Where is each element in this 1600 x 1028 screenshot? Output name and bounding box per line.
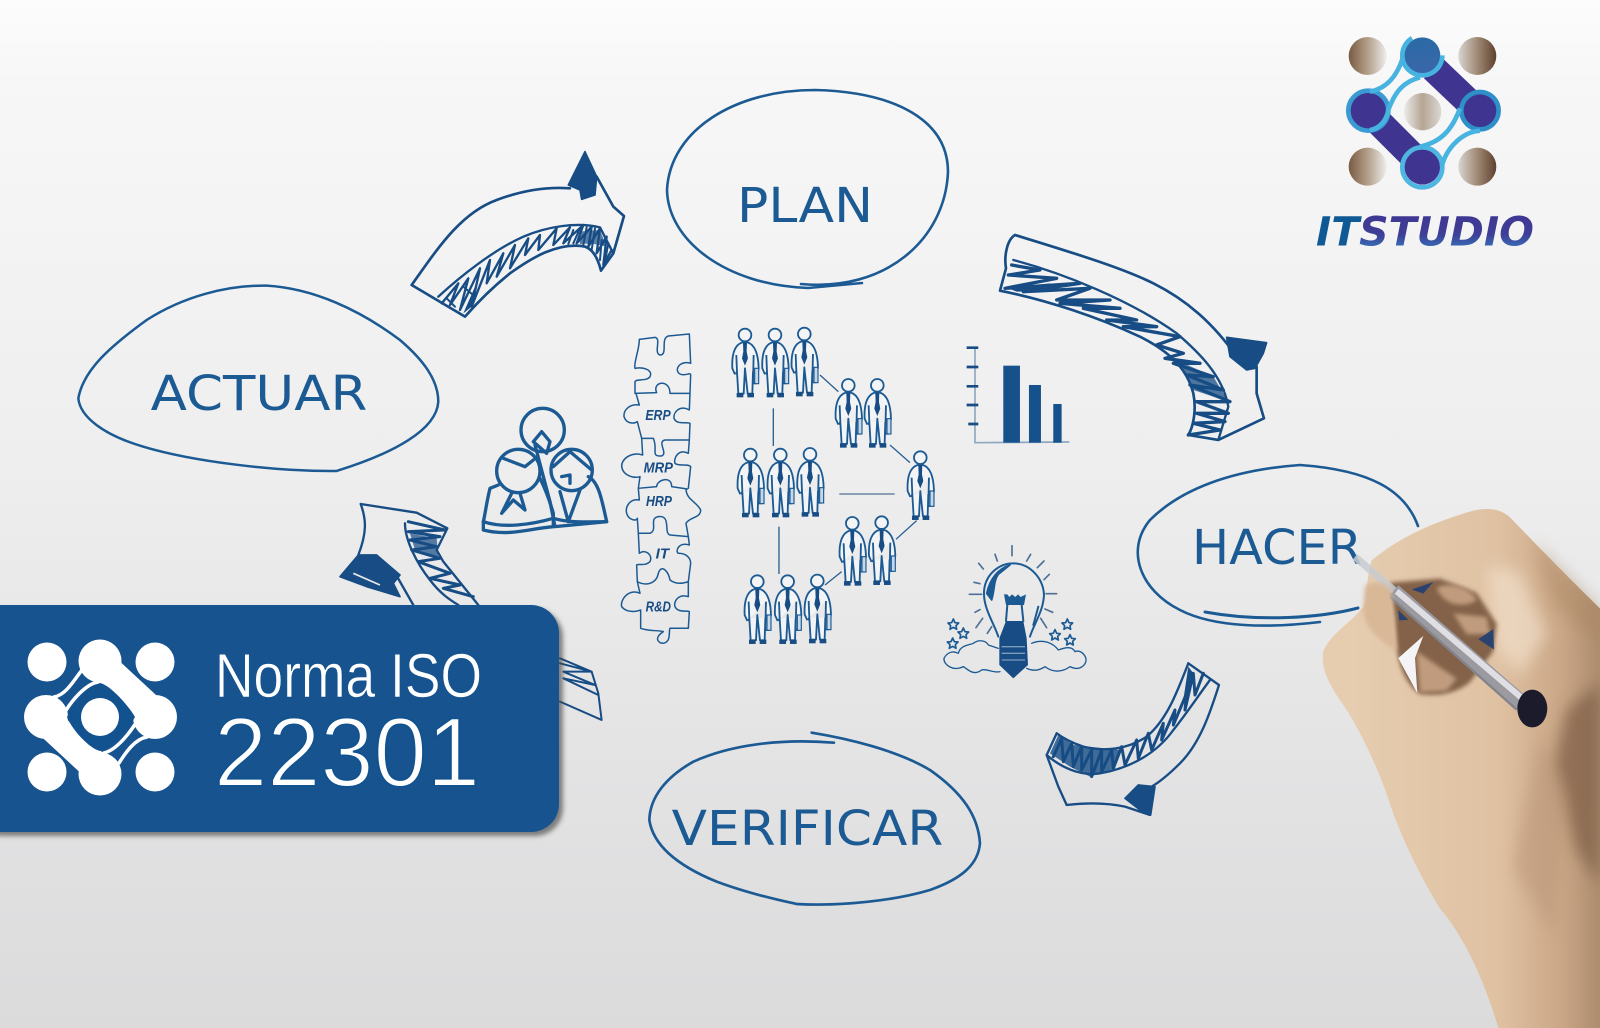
hand holding pen xyxy=(1323,509,1600,1028)
puzzle column xyxy=(621,334,701,643)
pen xyxy=(1355,557,1547,727)
org chart of people xyxy=(732,328,934,644)
bubble: VERIFICAR xyxy=(649,733,980,905)
arrow: actuar to plan xyxy=(412,152,624,317)
bubble: PLAN: PLAN xyxy=(737,178,873,234)
badge: Norma ISO 22301 xyxy=(0,605,559,832)
arrow: verificar to actuar xyxy=(340,504,602,720)
icon: team heads xyxy=(483,408,607,533)
logo: ITSTUDIO xyxy=(1316,35,1534,256)
icon: light bulb on clouds xyxy=(944,546,1086,678)
puzzle column: R&D xyxy=(646,599,671,615)
bubble: HACER xyxy=(1138,465,1418,626)
puzzle column: MRP xyxy=(644,460,673,476)
finger gap xyxy=(1390,579,1497,695)
icon: white badge logo xyxy=(24,640,177,796)
bubble: HACER: HACER xyxy=(1192,520,1362,576)
heading: Norma ISO: Norma ISO xyxy=(215,642,482,711)
arrow: hacer to verificar xyxy=(1047,663,1219,815)
puzzle column: IT xyxy=(656,547,670,563)
arrow: plan to hacer xyxy=(1000,235,1267,440)
thumb xyxy=(1363,583,1397,651)
puzzle column: HRP xyxy=(646,494,672,510)
puzzle column: ERP xyxy=(645,408,671,424)
bubble: ACTUAR: ACTUAR xyxy=(151,366,367,422)
bar chart xyxy=(967,347,1069,443)
heading: 22301: 22301 xyxy=(214,697,480,807)
bubble: VERIFICAR: VERIFICAR xyxy=(672,801,943,857)
hand shading xyxy=(1487,541,1600,936)
bubble: PLAN xyxy=(667,90,948,288)
logo: ITSTUDIO: ITSTUDIO xyxy=(1316,210,1534,256)
bubble: ACTUAR xyxy=(78,286,438,471)
